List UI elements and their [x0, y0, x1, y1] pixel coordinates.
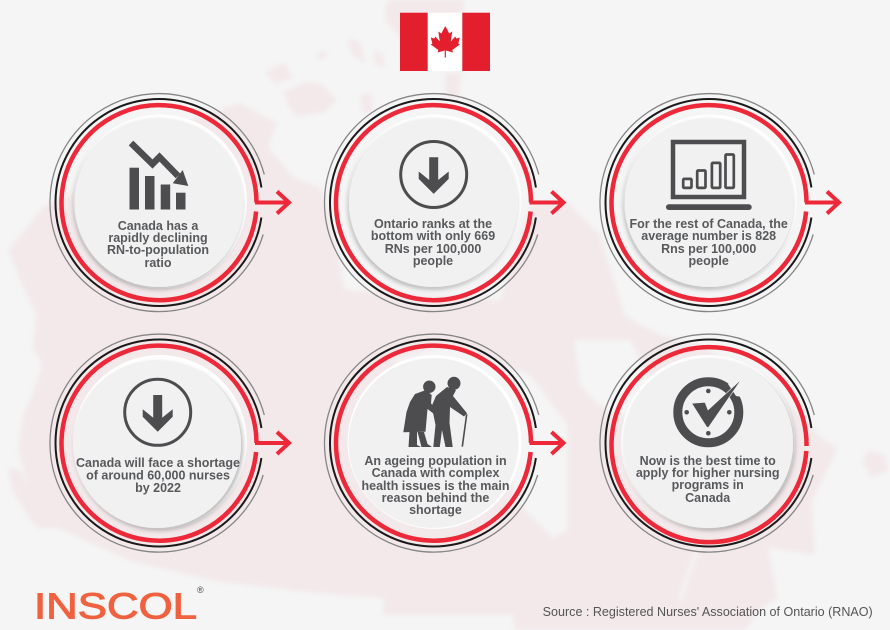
text: Ontario ranks: [371, 217, 495, 268]
panel: nurse shortage: [50, 334, 289, 552]
text: rest of Canada: For the rest of Canada, the: [630, 217, 788, 231]
icon: laptop with bars: [666, 142, 752, 210]
text: best time to apply: programs in: [672, 478, 744, 492]
logo: INSCOL: INSCOL: [34, 586, 197, 627]
icon: down arrow in circle: [401, 142, 467, 208]
panel: best time to apply: [600, 334, 814, 552]
text: best time to apply: [636, 454, 780, 505]
panel: ageing population: [324, 334, 564, 552]
panel: rest of Canada: [600, 94, 839, 312]
icon: falling bar chart: [130, 143, 188, 210]
icon: elderly couple: [403, 377, 467, 447]
text: rest of Canada: [630, 217, 788, 268]
source note: Source : Registered Nurses' Association of Ontario (RNAO): [543, 605, 873, 619]
text: declining ratio: rapidly declining: [108, 231, 208, 245]
text: best time to apply: Canada: [685, 491, 731, 505]
text: rest of Canada: Rns per 100,000: [661, 242, 756, 256]
text: nurse shortage: Canada will face a shortage: [76, 456, 240, 470]
text: nurse shortage: by 2022: [135, 481, 181, 495]
text: Ontario ranks: RNs per 100,000: [385, 242, 481, 256]
text: ageing population: Canada with complex: [372, 466, 499, 480]
icon: clock with check mark: [678, 372, 748, 443]
text: rest of Canada: average number is 828: [641, 229, 776, 243]
text: ageing population: An ageing population in: [364, 454, 507, 468]
text: best time to apply: apply for higher nursing: [636, 466, 780, 480]
text: Ontario ranks: bottom with only 669: [371, 229, 495, 243]
panel: declining ratio: [50, 94, 289, 312]
text: Ontario ranks: people: [413, 254, 453, 268]
panel: Ontario ranks: [324, 94, 564, 312]
text: nurse shortage: [76, 456, 240, 495]
text: declining ratio: RN-to-population: [107, 243, 209, 257]
text: nurse shortage: of around 60,000 nurses: [86, 468, 230, 482]
text: ageing population: health issues is the main: [362, 479, 509, 493]
text: declining ratio: ratio: [144, 256, 172, 270]
logo: INSCOL: ®: [197, 585, 204, 595]
text: ageing population: [362, 454, 509, 517]
text: declining ratio: Canada has a: [118, 219, 199, 233]
icon: down arrow in circle: [125, 379, 191, 445]
text: ageing population: shortage: [409, 503, 462, 517]
text: best time to apply: Now is the best time to: [640, 454, 776, 468]
text: ageing population: reason behind the: [382, 491, 489, 505]
flag of Canada: [400, 13, 490, 71]
text: Ontario ranks: Ontario ranks at the: [374, 217, 492, 231]
text: rest of Canada: people: [689, 254, 729, 268]
text: declining ratio: [107, 219, 209, 270]
